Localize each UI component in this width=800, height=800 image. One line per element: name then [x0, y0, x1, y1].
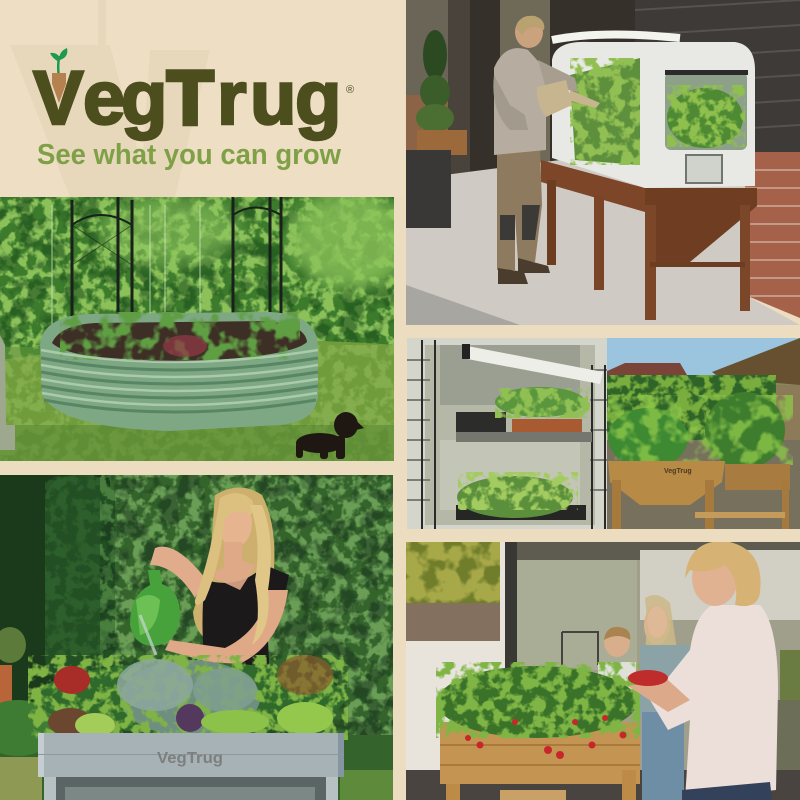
icon: soil wedge — [52, 73, 66, 103]
greenhouse edge — [0, 335, 15, 450]
panel: strawberry planter with family — [406, 541, 800, 800]
icon: green watering can — [130, 570, 180, 655]
arms — [150, 547, 205, 598]
woman in pink top — [628, 541, 778, 800]
hair back — [193, 488, 274, 655]
panel: woman watering planter — [0, 475, 393, 800]
strawberry plants — [436, 662, 640, 759]
trellis — [52, 197, 282, 324]
brick wall — [745, 152, 800, 318]
children — [598, 595, 690, 800]
planter brand: VegTrug — [664, 468, 692, 475]
window glass — [505, 542, 800, 772]
bushes — [606, 375, 776, 445]
panel: metal raised bed on lawn — [0, 190, 410, 461]
plastic cover — [552, 34, 755, 188]
strawberry bowl — [628, 670, 668, 686]
panel: greenhouse and planters — [407, 338, 800, 529]
logo wordmark: VegTrug — [33, 56, 341, 141]
hair front — [195, 493, 254, 605]
panel: man watering covered planter — [406, 0, 800, 325]
wooden planter — [541, 160, 757, 320]
seedlings — [457, 476, 573, 518]
greenhouse frame — [407, 338, 607, 529]
sky — [607, 338, 800, 375]
planter brand: VegTrug — [157, 750, 223, 767]
distant plants and ground — [0, 627, 26, 663]
panel: logo — [0, 0, 405, 197]
pots — [512, 419, 582, 432]
body — [202, 567, 289, 667]
wooden planters — [608, 461, 790, 529]
registered mark: ® — [346, 84, 354, 96]
deck — [406, 770, 800, 800]
face — [222, 511, 252, 545]
wooden planter — [440, 722, 640, 800]
dark cube — [406, 150, 451, 228]
raised bed — [40, 312, 318, 431]
clad wall — [635, 0, 800, 152]
icon: steel watering can — [537, 80, 600, 117]
foliage in planter — [28, 655, 348, 740]
man gardener — [493, 16, 578, 284]
tagline: See what you can grow — [37, 139, 341, 171]
tomato plants — [608, 408, 688, 461]
grey planter — [38, 733, 344, 800]
icon: sprout — [50, 48, 67, 78]
topiary — [416, 30, 467, 155]
icon: dachshund dog — [296, 412, 364, 459]
patio — [406, 160, 800, 325]
white wall — [406, 542, 506, 777]
woman — [150, 488, 289, 685]
shelves — [456, 432, 592, 442]
lawn — [0, 340, 394, 461]
roofs — [607, 363, 687, 375]
shrub and trough — [406, 542, 500, 641]
roll — [462, 345, 603, 384]
